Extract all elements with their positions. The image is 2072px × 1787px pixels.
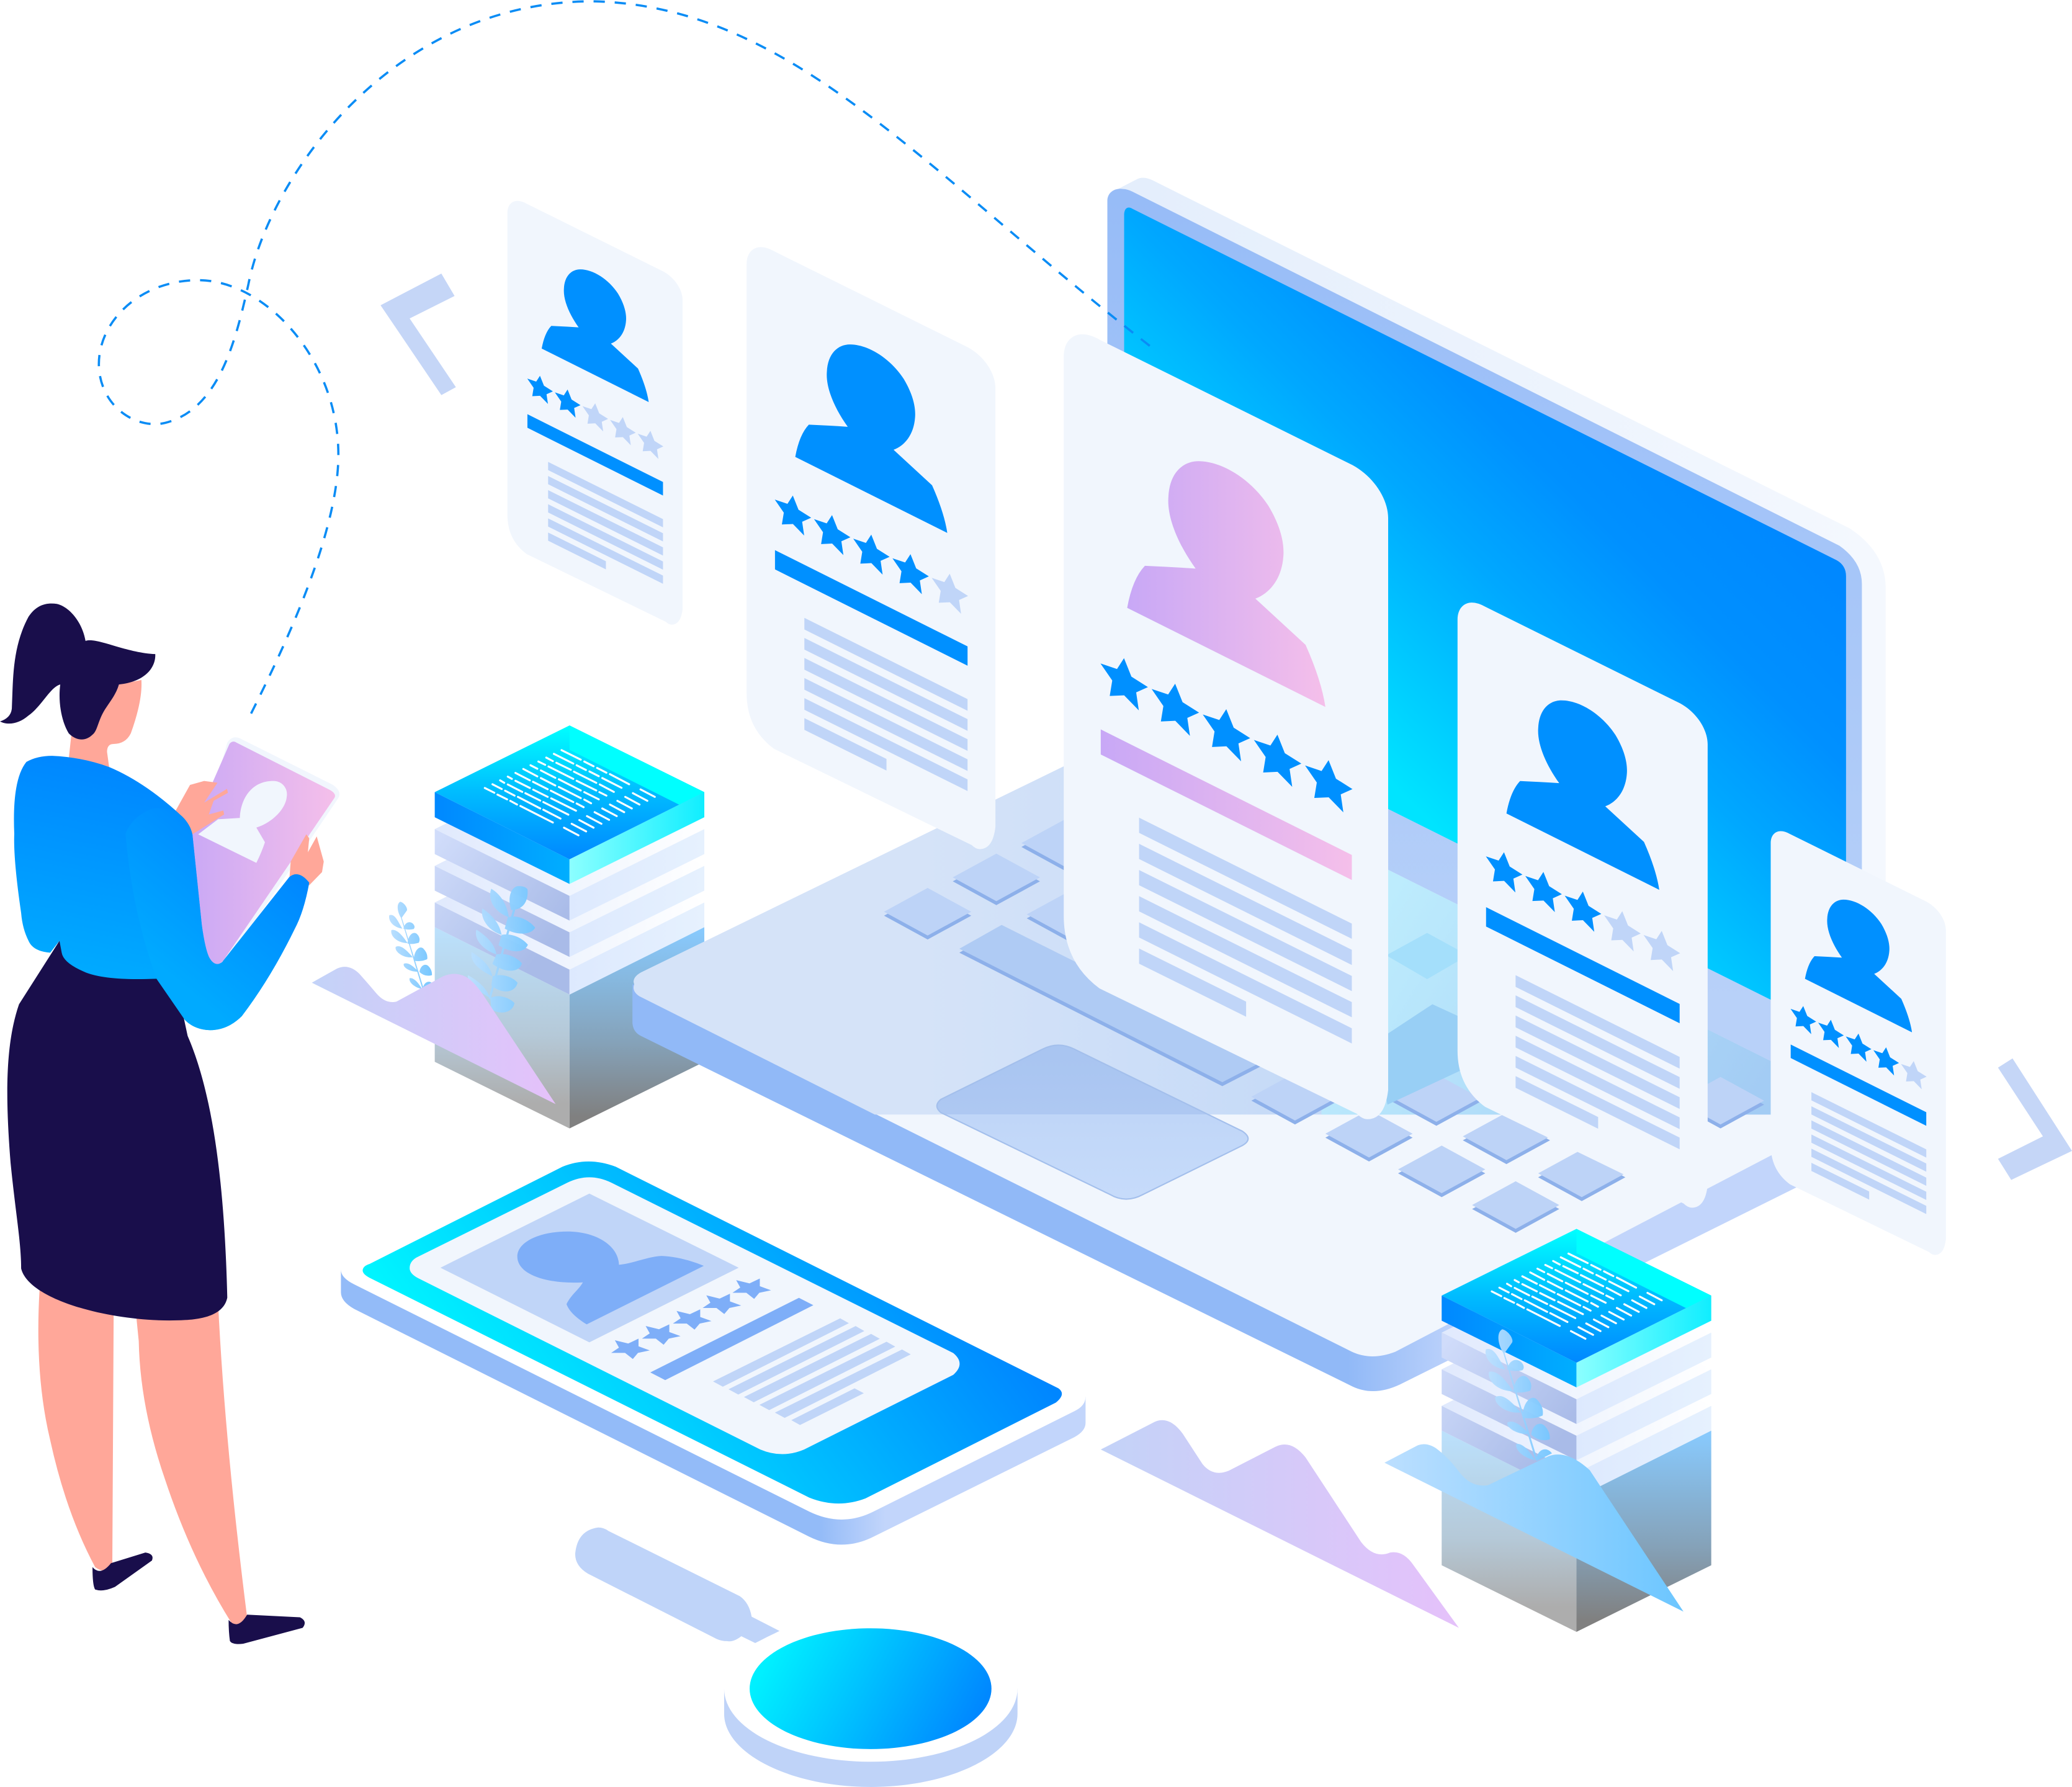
laptop base — [632, 737, 1863, 1391]
handle — [575, 1528, 779, 1643]
person icon — [1127, 461, 1325, 707]
name bar — [775, 550, 967, 666]
woman holding tablet — [0, 604, 339, 1644]
review lines — [804, 618, 967, 791]
keyboard keys — [884, 819, 1764, 1233]
tablet — [185, 737, 339, 965]
plant: large left — [468, 886, 535, 1013]
review lines — [1139, 818, 1352, 1044]
phone screen — [362, 1162, 1062, 1503]
review lines — [713, 1319, 911, 1425]
touchpad — [937, 1045, 1248, 1199]
photo — [441, 1194, 738, 1342]
phone profile panel — [410, 1177, 959, 1454]
profile card: medium right — [1458, 602, 1708, 1207]
profile card: medium left — [747, 247, 995, 849]
profile card: small left — [508, 201, 683, 625]
name bar — [527, 414, 663, 496]
star rating: 4 of 5 — [775, 496, 968, 614]
tablet person icon — [198, 781, 287, 863]
lens — [750, 1628, 992, 1749]
person icon — [1507, 701, 1659, 890]
shoes — [92, 1552, 153, 1590]
plant: small left — [389, 902, 433, 990]
person icon — [796, 344, 948, 533]
name bar — [1486, 907, 1680, 1023]
right hand — [289, 835, 324, 885]
profile card: small right — [1770, 831, 1946, 1255]
review lines — [1515, 975, 1680, 1149]
review lines — [548, 462, 663, 584]
magnifying glass — [575, 1528, 1018, 1787]
blouse — [14, 756, 309, 1030]
stars — [611, 1279, 771, 1359]
neck and face — [69, 680, 141, 771]
star rating: 2 of 5 — [527, 376, 663, 459]
star rating: 3 of 5 — [1486, 853, 1680, 971]
hill: middle — [1101, 1420, 1459, 1628]
hill: left — [312, 967, 555, 1104]
review lines — [1811, 1092, 1926, 1214]
monitor — [1107, 178, 1886, 1136]
name bar — [1101, 730, 1352, 880]
name bar — [650, 1298, 814, 1380]
profile card: featured center — [1064, 334, 1388, 1119]
server cube: left — [435, 725, 704, 1129]
name bar — [1791, 1044, 1926, 1126]
server cube: right — [1442, 1229, 1711, 1632]
legs — [38, 1288, 114, 1570]
hair — [0, 604, 155, 740]
sleeve — [125, 808, 309, 1030]
plant: right — [1486, 1329, 1552, 1461]
person icon — [542, 269, 648, 402]
skirt — [7, 941, 227, 1320]
smartphone — [341, 1150, 1085, 1544]
left hand — [176, 781, 228, 835]
chevron: top left — [380, 274, 456, 395]
star rating: 5 of 5 — [1100, 658, 1353, 812]
star rating: 4 of 5 — [1790, 1006, 1927, 1090]
hill: right — [1384, 1444, 1684, 1611]
silhouette — [518, 1232, 704, 1324]
chevron: right — [1998, 1059, 2072, 1180]
person icon — [1805, 900, 1912, 1032]
dashed flight path — [99, 1, 1154, 714]
lens rim — [724, 1689, 1018, 1787]
